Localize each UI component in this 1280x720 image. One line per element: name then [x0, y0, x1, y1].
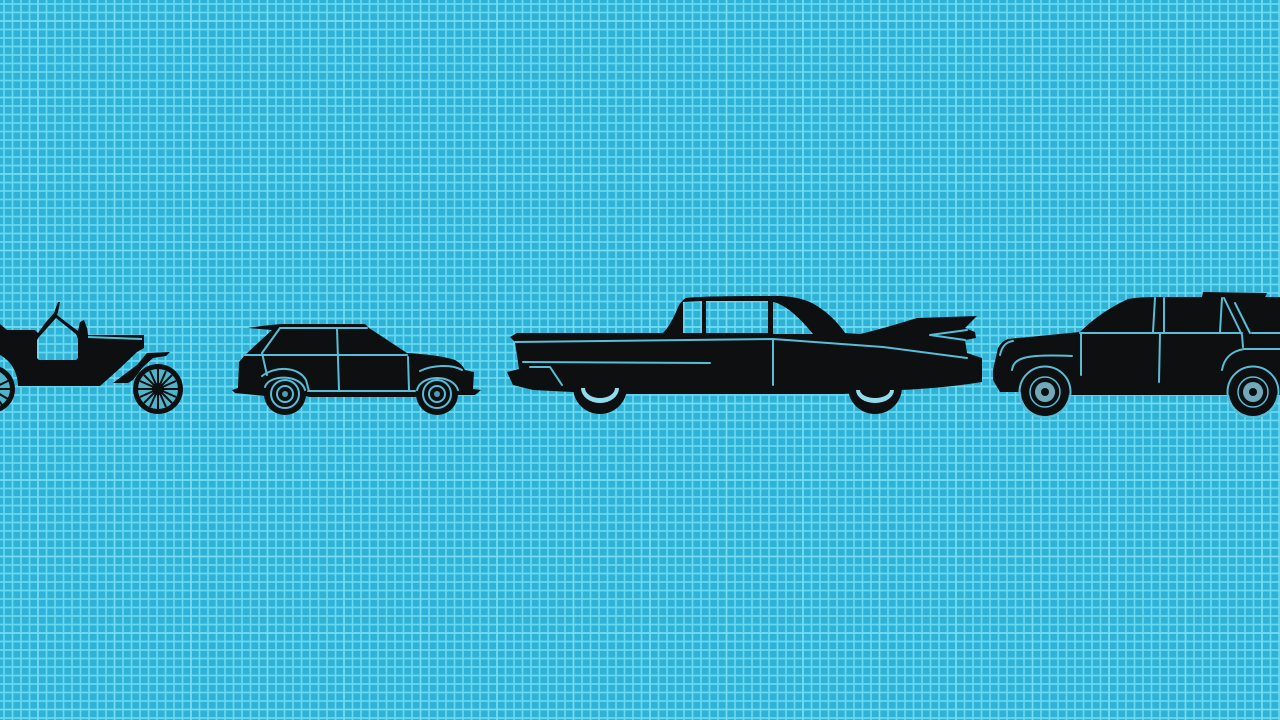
- rear spoked wheel: [0, 365, 15, 413]
- car 1: vintage open tourer: [0, 302, 183, 414]
- body trim lines: [245, 328, 462, 391]
- chrome trim lines: [515, 330, 967, 385]
- front fender: [113, 352, 170, 383]
- door and window lines: [1000, 298, 1280, 382]
- front spoked wheel: [133, 364, 183, 414]
- hood trim line: [88, 337, 142, 339]
- car 2: station wagon: [232, 324, 481, 415]
- front wheel: [416, 373, 458, 415]
- rear wheel: [1228, 366, 1278, 418]
- car 3: 1950s tail-fin sedan: [507, 296, 982, 414]
- wheels: [573, 360, 902, 414]
- wheel arches: [265, 378, 458, 390]
- car 4: SUV, cropped at right edge: [993, 292, 1280, 418]
- front wheel: [1020, 366, 1070, 418]
- rear wheel: [264, 373, 306, 415]
